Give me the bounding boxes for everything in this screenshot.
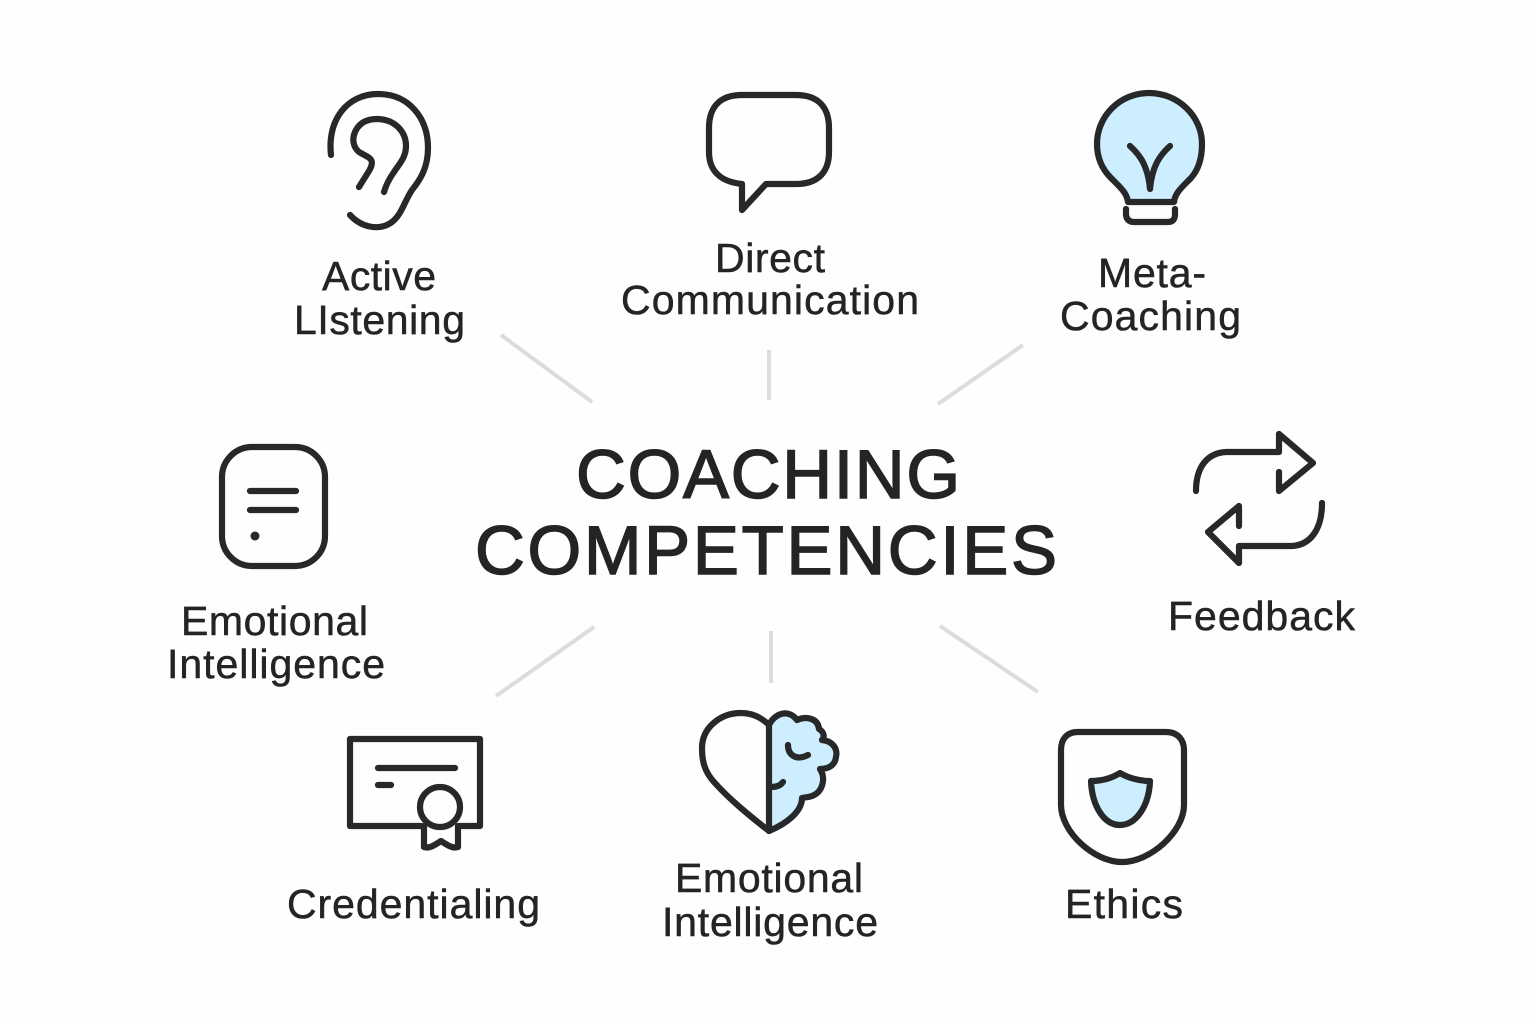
- label: Meta-Coaching: Coaching: [1060, 293, 1241, 339]
- label: Direct Communication: Communication: [621, 277, 919, 323]
- label: Meta-Coaching: [1060, 250, 1241, 339]
- label: Emotional Intelligence (center): Emotional: [675, 855, 863, 901]
- icon: certificate: [350, 739, 480, 848]
- icon: light bulb: [1097, 93, 1202, 222]
- label: Direct Communication: [621, 235, 919, 323]
- label: Meta-Coaching: Meta-: [1098, 250, 1206, 296]
- icon: speech bubble: [709, 95, 829, 210]
- icon: ear: [330, 94, 428, 227]
- icon: heart and brain: [702, 713, 836, 831]
- label: Feedback: Feedback: [1168, 593, 1356, 639]
- label: Active Listening: LIstening: [294, 297, 465, 343]
- title: COACHING: [576, 436, 960, 513]
- icon: shield: [1061, 732, 1184, 862]
- label: Credentialing: Credentialing: [287, 881, 540, 927]
- label: Direct Communication: Direct: [715, 235, 826, 281]
- icon: feedback arrows: [1196, 434, 1322, 563]
- label: Active Listening: Active: [322, 253, 436, 299]
- label: Emotional Intelligence (center): Intelligence: [662, 899, 878, 945]
- title: COMPETENCIES: [475, 512, 1057, 589]
- label: Emotional Intelligence (left): Intelligence: [167, 641, 385, 687]
- icon: document card: [222, 447, 325, 566]
- label: Emotional Intelligence (left): [167, 598, 385, 687]
- label: Ethics: Ethics: [1065, 881, 1183, 927]
- label: Active Listening: [294, 253, 465, 343]
- title: [475, 436, 1057, 589]
- label: Emotional Intelligence (center): [662, 855, 878, 945]
- label: Emotional Intelligence (left): Emotional: [181, 598, 368, 644]
- connector lines: [496, 335, 1038, 696]
